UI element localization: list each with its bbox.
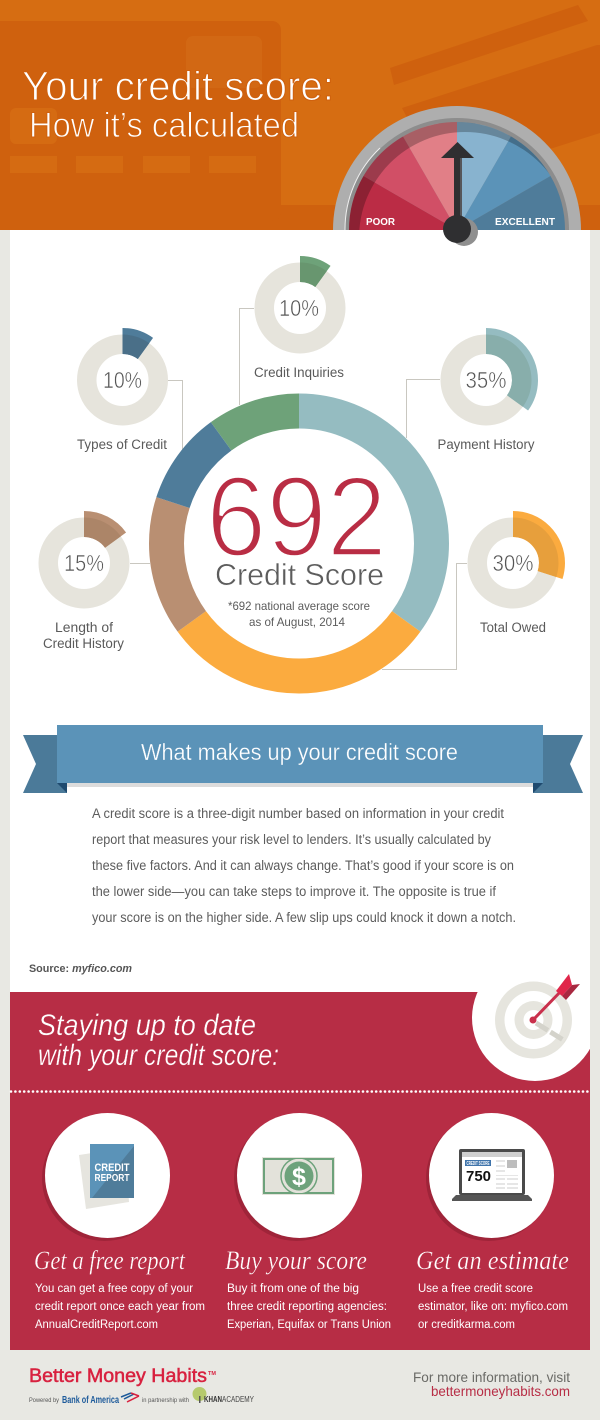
gauge label: excellent: EXCELLENT <box>495 216 556 228</box>
source note: Source: myfico.com <box>29 963 132 975</box>
footer link: bettermoneyhabits.com <box>431 1383 570 1399</box>
donut: length of credit history: Length of <box>55 620 113 635</box>
footer brand: Better Money Habits <box>29 1366 207 1387</box>
step: get a free report: AnnualCreditReport.com <box>35 1319 158 1331</box>
donut: credit inquiries <box>254 269 344 380</box>
credit score label: Credit Score <box>215 557 384 592</box>
icon: laptop <box>452 1149 532 1201</box>
footer brand: KHAN <box>204 1395 222 1404</box>
ribbon heading: What makes up your credit score <box>141 739 458 765</box>
step: get a free report: You can get a free copy of your <box>35 1283 193 1295</box>
footer brand: TM <box>208 1371 216 1377</box>
ribbon heading <box>23 725 583 793</box>
target icon <box>472 974 590 1081</box>
step: buy your score <box>225 1113 391 1331</box>
connector lines <box>130 308 467 670</box>
section heading: with your credit score: <box>38 1039 279 1072</box>
score footnote: *692 national average score <box>228 599 370 613</box>
donut: length of credit history: 15% <box>64 550 104 576</box>
title <box>22 63 334 145</box>
step: get an estimate: estimator, like on: myfico.com <box>418 1301 568 1313</box>
donut: length of credit history <box>43 524 124 651</box>
footer brand <box>29 1366 255 1406</box>
footer brand: Powered by <box>29 1397 60 1404</box>
step: buy your score: Experian, Equifax or Trans Union <box>227 1319 391 1331</box>
step: buy your score: Buy your score <box>225 1246 367 1275</box>
icon: dollar bill <box>262 1157 335 1195</box>
footer link: For more information, visit <box>413 1369 570 1385</box>
donut: types of credit: 10% <box>103 367 142 393</box>
score 692: 692 <box>206 454 387 581</box>
gauge label: poor: POOR <box>366 216 395 228</box>
donut: payment history: Payment History <box>438 437 535 452</box>
icon: bank flag <box>121 1393 139 1402</box>
section heading: Staying up to date <box>38 1009 256 1042</box>
score footnote <box>228 599 370 629</box>
footer link <box>413 1369 570 1399</box>
title: Your credit score: <box>22 63 334 109</box>
icon: credit report: CREDIT <box>94 1162 130 1174</box>
donut: total owed: 30% <box>492 550 534 576</box>
icon: laptop: CREDIT SCORE <box>466 1161 490 1167</box>
step: buy your score: three credit reporting agencies: <box>227 1301 387 1313</box>
step: get an estimate: Get an estimate <box>416 1246 569 1275</box>
icon: credit report: REPORT <box>94 1172 130 1184</box>
donut: length of credit history: Credit History <box>43 636 124 651</box>
footer brand: Bank of America <box>62 1395 119 1406</box>
explanation paragraph: report that measures your risk level to lenders. It’s usually calculated by <box>92 832 491 847</box>
step: get a free report: Get a free report <box>34 1246 186 1275</box>
score gauge <box>333 106 581 230</box>
donut: credit inquiries: 10% <box>279 295 319 321</box>
donut: types of credit: Types of Credit <box>77 437 167 452</box>
donut: payment history: 35% <box>466 367 506 393</box>
explanation paragraph: A credit score is a three-digit number based on information in your credit <box>92 806 504 821</box>
step: get an estimate: or creditkarma.com <box>418 1319 515 1331</box>
step: buy your score: Buy it from one of the big <box>227 1283 359 1295</box>
header banner <box>0 0 600 230</box>
explanation paragraph: your score is on the higher side. A few slip ups could knock it down a notch. <box>92 910 516 925</box>
step: get an estimate <box>416 1113 569 1331</box>
step: get an estimate: Use a free credit score <box>418 1283 533 1295</box>
background credit card <box>0 21 281 221</box>
explanation paragraph: these five factors. And it can always change. That’s good if your score is on <box>92 858 514 873</box>
icon: laptop: 750 <box>466 1168 491 1185</box>
main donut chart <box>166 411 432 676</box>
donut: credit inquiries: Credit Inquiries <box>254 365 344 380</box>
donut: total owed: Total Owed <box>480 620 546 635</box>
step: get a free report <box>34 1113 205 1331</box>
explanation paragraph: the lower side—you can take steps to improve it. The opposite is true if <box>92 884 496 899</box>
background card stripes <box>390 5 600 148</box>
donut: total owed <box>474 524 552 635</box>
icon: credit report <box>79 1144 134 1209</box>
footer brand: ACADEMY <box>222 1395 255 1404</box>
red section <box>10 955 598 1350</box>
score footnote: as of August, 2014 <box>249 615 345 629</box>
donut: types of credit <box>77 341 167 452</box>
donut: payment history <box>438 341 535 452</box>
title: How it’s calculated <box>29 106 299 145</box>
gauge needle <box>441 142 478 246</box>
explanation paragraph <box>92 806 516 925</box>
footer brand: in partnership with <box>142 1397 189 1404</box>
section heading <box>38 1009 279 1072</box>
icon: tree <box>192 1387 206 1403</box>
icon: dollar bill: $ <box>292 1163 306 1191</box>
step: get a free report: credit report once each year from <box>35 1301 205 1313</box>
